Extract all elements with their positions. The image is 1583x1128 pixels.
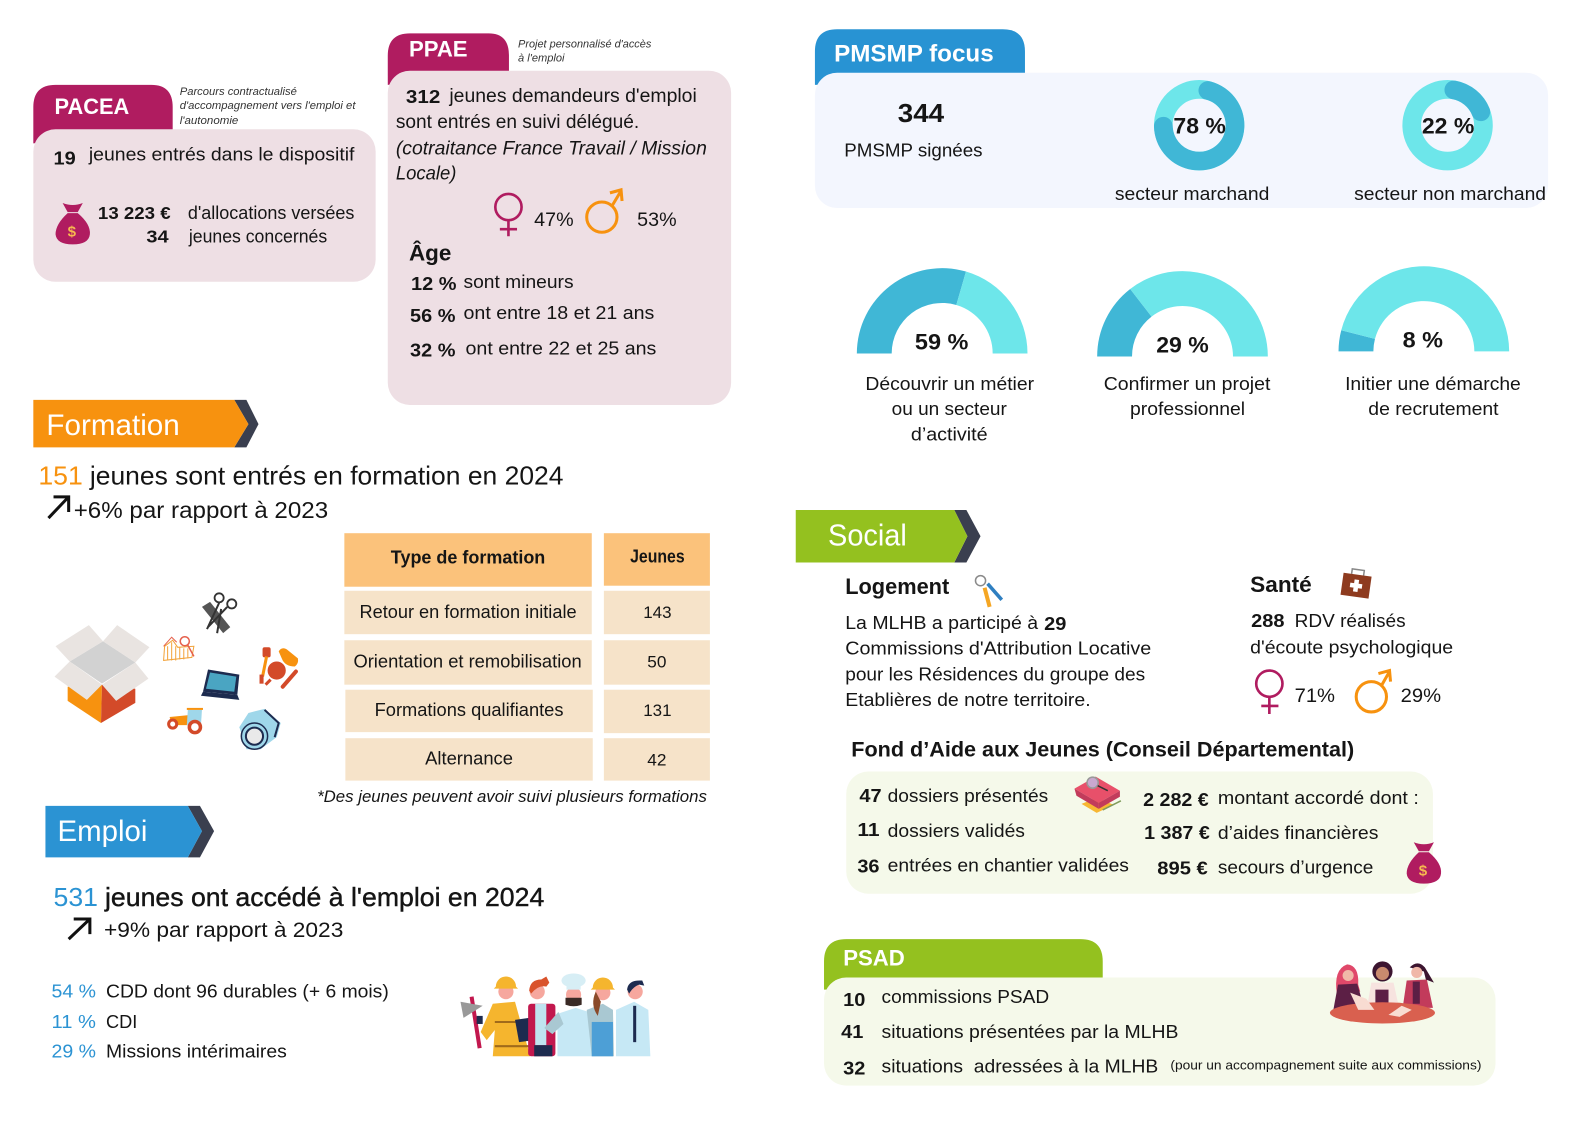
PACEA allowances: 34 (146, 226, 169, 246)
PSAD figures: 10 (843, 990, 865, 1010)
PACEA allowances (98, 203, 354, 246)
PSAD figures: 41 (841, 1022, 863, 1042)
amounts: 2 282 € (1143, 790, 1209, 810)
gauge: découvrir un métier: Découvrir un métier (865, 374, 1034, 394)
age breakdown: 12 % (411, 274, 456, 294)
gauge: confirmer un projet: Confirmer un projet (1104, 374, 1270, 394)
Logement text: Commissions d'Attribution Locative (845, 638, 1151, 658)
amounts: d’aides financières (1218, 823, 1378, 843)
PSAD figures: (pour un accompagnement suite aux commissions) (1170, 1058, 1481, 1072)
age breakdown: ont entre 18 et 21 ans (464, 303, 654, 323)
Santé text (1250, 611, 1453, 657)
emploi headline: +9% par rapport à 2023 (104, 919, 343, 942)
emploi headline (54, 882, 544, 942)
dossier counts: dossiers présentés (888, 786, 1048, 806)
icon: female (1256, 671, 1282, 714)
PPAE description: à l'emploi (518, 53, 565, 65)
block: Santé (1250, 568, 1453, 714)
formation headline: 151 (38, 461, 83, 491)
banner: Formation (33, 400, 259, 447)
amounts: secours d’urgence (1218, 858, 1373, 878)
icon: camera (239, 709, 281, 749)
dossier counts: 11 (857, 820, 880, 840)
age breakdown (409, 241, 656, 360)
PSAD figures: 32 (843, 1058, 865, 1078)
formation headline: jeunes sont entrés en formation en 2024 (89, 461, 563, 491)
emploi breakdown: Missions intérimaires (106, 1041, 287, 1061)
male share: 53% (637, 210, 677, 231)
donut: secteur non marchand: secteur non marchand (1354, 184, 1546, 204)
gauge: initier une démarche: de recrutement (1368, 399, 1499, 419)
icon: money bag (1407, 842, 1441, 884)
PACEA description (180, 86, 357, 127)
panel: Fond d'Aide aux Jeunes (846, 772, 1441, 894)
Logement text: pour les Résidences du groupe des (845, 665, 1145, 685)
table: types de formation: 143 (643, 604, 672, 622)
icon: male (587, 190, 622, 232)
PSAD figures: commissions PSAD (882, 987, 1049, 1007)
donut: secteur non marchand (1354, 84, 1546, 204)
emploi breakdown: CDI (106, 1012, 137, 1032)
PPAE text block (396, 86, 707, 185)
male share: 29% (1401, 686, 1441, 707)
age breakdown: 56 % (410, 306, 455, 326)
table footnote: *Des jeunes peuvent avoir suivi plusieurs formations (317, 787, 707, 806)
icon: keys (975, 576, 1002, 607)
donut: secteur marchand: 78 % (1173, 113, 1226, 138)
icon: meeting (1330, 961, 1435, 1023)
table: types de formation: Alternance (425, 748, 513, 768)
table: types de formation: Orientation et remobilisation (353, 652, 582, 672)
emploi breakdown: 11 % (52, 1012, 96, 1032)
block: Logement (845, 574, 1151, 710)
icon: money bag: $ (68, 223, 77, 240)
banner: Formation: Formation (46, 409, 180, 442)
table: types de formation: 131 (643, 702, 672, 720)
icon: cooking (260, 647, 298, 687)
age breakdown: ont entre 22 et 25 ans (466, 338, 656, 358)
heading: Fond d'Aide aux Jeunes: Fond d’Aide aux Jeunes (Conseil Départemental) (851, 738, 1354, 761)
heading: PMSMP focus: PMSMP focus (834, 41, 994, 68)
icon: tractor (169, 708, 203, 733)
PMSMP count (844, 98, 983, 161)
PSAD figures (841, 987, 1481, 1078)
female share: 47% (534, 210, 574, 231)
PPAE text block: 312 (406, 87, 440, 107)
PACEA allowances: 13 223 € (98, 203, 171, 223)
Logement text (845, 613, 1151, 710)
emploi breakdown: 54 % (52, 982, 96, 1002)
emploi breakdown: 29 % (52, 1041, 96, 1061)
icon: laptop (201, 670, 239, 700)
panel: PPAE (388, 33, 731, 405)
gauge: découvrir un métier: 59 % (915, 329, 969, 354)
gauge: initier une démarche: Initier une démarche (1345, 374, 1521, 394)
table: types de formation: Jeunes (630, 546, 685, 566)
PACEA entries (54, 145, 355, 169)
PSAD figures: situations présentées par la MLHB (882, 1022, 1178, 1042)
table: types de formation (344, 533, 710, 781)
emploi breakdown (52, 982, 389, 1061)
banner: Emploi: Emploi (58, 815, 147, 848)
block: Santé: Santé (1250, 572, 1312, 597)
gauge: découvrir un métier (857, 268, 1034, 444)
heading: PSAD: PSAD (843, 945, 905, 970)
icon: male (1356, 671, 1391, 712)
dossier counts: dossiers validés (888, 821, 1025, 841)
age breakdown: 32 % (410, 340, 455, 360)
icon: workers (460, 973, 650, 1056)
icon: medical kit (1341, 568, 1372, 599)
icon: female (495, 194, 522, 236)
PACEA allowances: d'allocations versées (188, 203, 354, 223)
icon: money bag (56, 203, 90, 244)
PPAE text block: Locale) (396, 164, 456, 185)
Logement text: La MLHB a participé à (845, 613, 1039, 633)
Santé text: RDV réalisés (1295, 611, 1406, 631)
heading: PACEA: PACEA (55, 94, 129, 119)
icon: scissors and comb (202, 593, 236, 633)
gauge: initier une démarche: 8 % (1403, 327, 1443, 352)
gauge: confirmer un projet: 29 % (1156, 332, 1209, 357)
icon: open box (55, 625, 149, 723)
emploi headline: 531 (54, 882, 98, 912)
banner: Social: Social (828, 519, 907, 552)
amounts (1143, 788, 1419, 879)
table: types de formation: Retour en formation initiale (359, 602, 577, 622)
PMSMP count: 344 (898, 98, 945, 128)
PPAE text block: sont entrés en suivi délégué. (396, 112, 639, 133)
PACEA entries: jeunes entrés dans le dispositif (88, 145, 355, 165)
amounts: montant accordé dont : (1218, 788, 1419, 808)
donut: secteur non marchand: 22 % (1422, 113, 1475, 138)
PSAD figures: situations adressées à la MLHB (882, 1056, 1158, 1076)
gauge: initier une démarche (1339, 266, 1521, 419)
dossier counts (857, 786, 1129, 877)
Santé text: 288 (1251, 611, 1284, 631)
PPAE description: Projet personnalisé d'accès (518, 38, 652, 50)
block: Logement: Logement (845, 574, 950, 599)
gauge: découvrir un métier: d’activité (911, 424, 988, 444)
age breakdown: sont mineurs (464, 272, 574, 292)
PMSMP count: PMSMP signées (844, 141, 983, 161)
icon: books (1074, 777, 1121, 813)
PPAE text block: (cotraitance France Travail / Mission (396, 139, 707, 160)
dossier counts: 47 (859, 786, 882, 806)
PACEA allowances: jeunes concernés (188, 226, 327, 246)
panel: PSAD (824, 939, 1496, 1086)
age breakdown: Âge (409, 241, 451, 266)
dossier counts: entrées en chantier validées (888, 855, 1129, 875)
PACEA description: d'accompagnement vers l'emploi et (180, 100, 357, 112)
table: types de formation: 50 (647, 654, 666, 672)
amounts: 1 387 € (1144, 823, 1210, 843)
icon: chart and magnifier (164, 637, 194, 660)
gauge: confirmer un projet: professionnel (1130, 399, 1245, 419)
PPAE description (518, 38, 652, 65)
heading: PPAE: PPAE (409, 37, 468, 62)
PACEA description: l'autonomie (180, 115, 238, 127)
donut: secteur marchand (1115, 82, 1269, 204)
PACEA entries: 19 (54, 149, 76, 169)
PPAE text block: jeunes demandeurs d'emploi (448, 86, 697, 107)
PACEA description: Parcours contractualisé (180, 86, 297, 98)
donut: secteur marchand: secteur marchand (1115, 184, 1269, 204)
amounts: 895 € (1157, 859, 1208, 879)
Santé text: d'écoute psychologique (1250, 637, 1453, 657)
formation headline: +6% par rapport à 2023 (74, 497, 328, 523)
female share: 71% (1295, 686, 1335, 707)
emploi headline: jeunes ont accédé à l'emploi en 2024 (104, 882, 544, 912)
panel: PMSMP focus (815, 29, 1548, 208)
banner: Emploi (45, 806, 214, 857)
table: types de formation: Type de formation (391, 547, 545, 567)
panel: PACEA (33, 85, 376, 282)
banner: Social (796, 510, 981, 562)
dossier counts: 36 (857, 857, 880, 877)
gauge: confirmer un projet (1097, 271, 1270, 419)
Logement text: Etablières de notre territoire. (845, 690, 1091, 710)
Logement text: 29 (1044, 614, 1066, 634)
table: types de formation: Formations qualifiantes (375, 700, 563, 720)
table: types de formation: 42 (647, 751, 666, 769)
icon: money bag: $ (1419, 863, 1428, 880)
formation headline (38, 461, 563, 523)
gauge: découvrir un métier: ou un secteur (892, 399, 1007, 419)
emploi breakdown: CDD dont 96 durables (+ 6 mois) (106, 982, 389, 1002)
